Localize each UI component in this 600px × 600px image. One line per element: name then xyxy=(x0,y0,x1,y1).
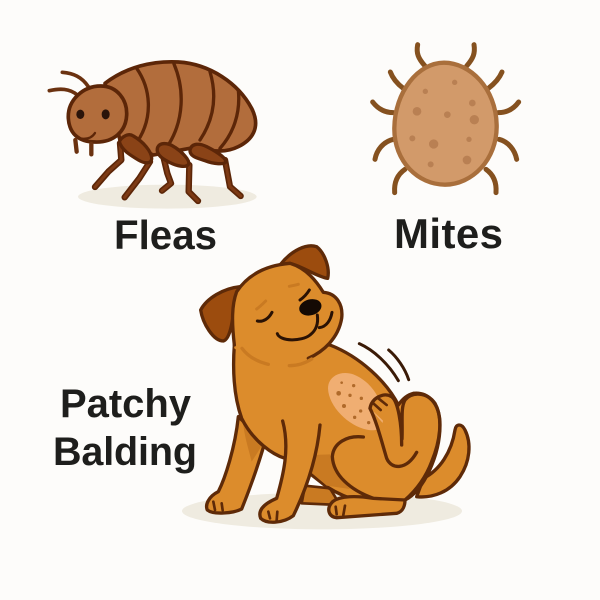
flea eyes xyxy=(76,109,110,119)
flea body segments xyxy=(137,64,239,148)
neck folds xyxy=(242,348,312,366)
brow marks xyxy=(257,284,298,309)
bald patch xyxy=(328,373,383,430)
dog far front leg xyxy=(207,417,265,513)
dog belly shade xyxy=(309,454,350,489)
flea head xyxy=(68,86,127,142)
dog body xyxy=(234,345,440,510)
label: Mites: Mites xyxy=(394,210,503,257)
dog ground shadow xyxy=(182,493,462,529)
flea antennae xyxy=(49,72,88,95)
closed eyes xyxy=(257,290,309,321)
illustration: flea xyxy=(49,62,257,209)
illustration: scratching dog xyxy=(182,246,469,529)
flea thighs xyxy=(119,135,226,166)
motion lines xyxy=(359,344,409,381)
head fill xyxy=(233,263,342,363)
label: Patchy Balding: Patchy xyxy=(60,382,192,426)
front toes xyxy=(213,502,277,520)
label: Patchy Balding: Balding xyxy=(53,430,197,474)
patch spots xyxy=(336,381,370,424)
label: Fleas: Fleas xyxy=(114,212,217,258)
flea body xyxy=(105,62,256,155)
mite legs xyxy=(373,45,519,193)
mite spots xyxy=(409,80,479,167)
dog scratching paw xyxy=(370,395,417,466)
dog tail xyxy=(417,425,469,497)
flea mouth parts xyxy=(75,140,91,154)
hind toes xyxy=(336,506,345,515)
dog head xyxy=(233,263,342,363)
flea legs xyxy=(95,143,241,201)
dog nose xyxy=(297,297,323,318)
dog left ear xyxy=(201,287,240,341)
dog hind foot xyxy=(329,497,405,518)
illustration: mite xyxy=(373,45,519,193)
dog far leg shade xyxy=(243,425,264,462)
dog raised hind leg xyxy=(332,394,440,500)
dog right ear xyxy=(280,246,328,278)
mite body xyxy=(394,63,497,185)
flea ground shadow xyxy=(78,185,257,209)
dog far hind leg xyxy=(302,486,340,505)
paw toes xyxy=(373,398,387,410)
label: Patchy Balding xyxy=(53,382,197,474)
flea smile xyxy=(82,133,95,139)
head outline xyxy=(233,263,342,358)
dog mouth xyxy=(277,312,332,340)
dog front leg xyxy=(260,421,320,522)
